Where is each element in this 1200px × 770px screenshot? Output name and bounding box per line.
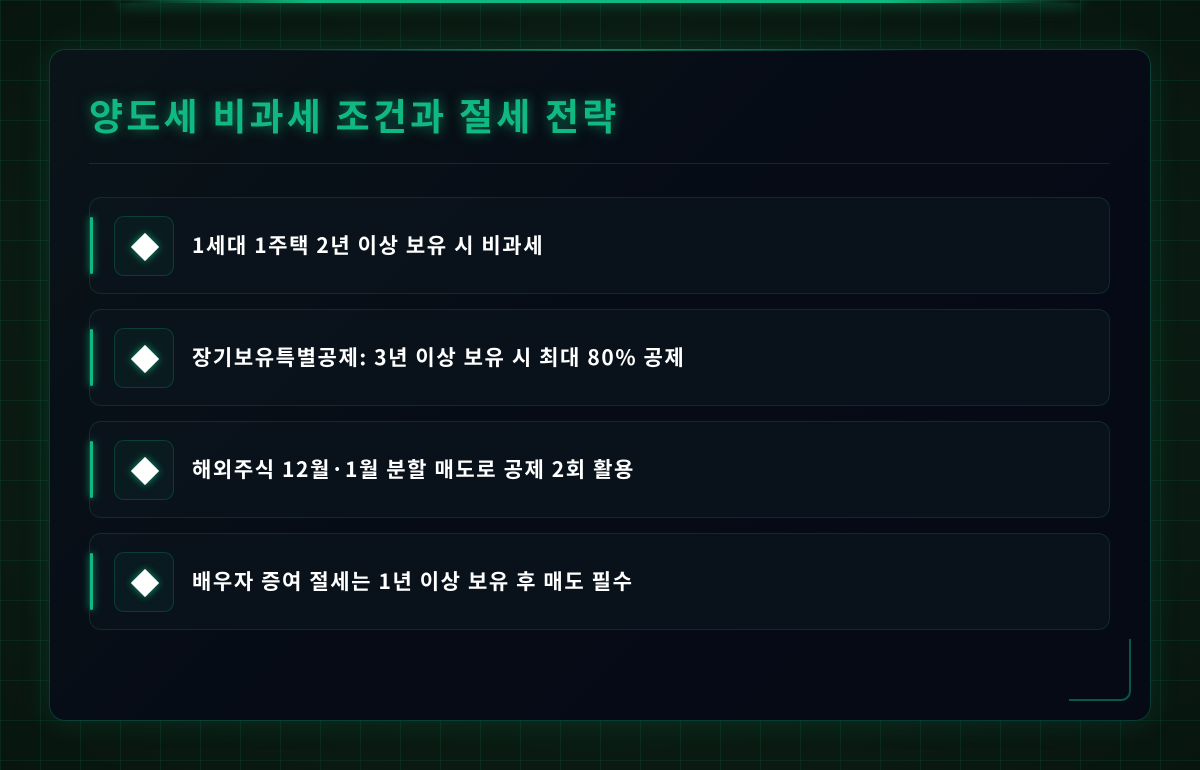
item 3: [89, 421, 1110, 518]
text 2: 장기보유특별공제: 3년 이상 보유 시 최대 80% 공제: [192, 342, 685, 372]
text 3: 해외주식 12월·1월 분할 매도로 공제 2회 활용: [192, 454, 635, 484]
corner accent: [1069, 639, 1131, 701]
text 1: 1세대 1주택 2년 이상 보유 시 비과세: [192, 230, 544, 260]
item 4: [89, 533, 1110, 630]
icon: diamond: [114, 328, 174, 388]
icon: diamond: [114, 216, 174, 276]
text 4: 배우자 증여 절세는 1년 이상 보유 후 매도 필수: [192, 566, 633, 596]
icon: diamond: [114, 552, 174, 612]
icon: diamond: [114, 440, 174, 500]
item 1: [89, 197, 1110, 294]
item 2: [89, 309, 1110, 406]
title: 양도세 비과세 조건과 절세 전략: [89, 87, 620, 141]
